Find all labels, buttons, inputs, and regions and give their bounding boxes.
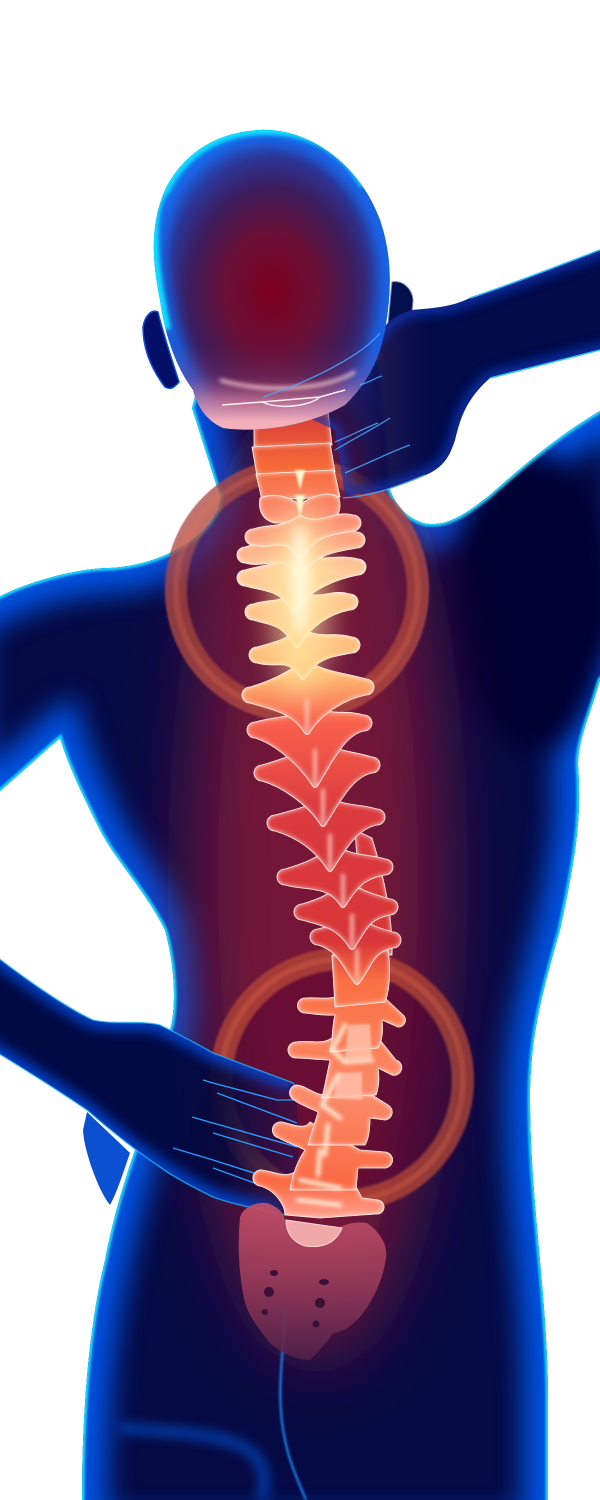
- torso silhouette: [0, 340, 600, 1500]
- icon: right ear: [388, 282, 413, 325]
- torso blue rim glow: [0, 360, 600, 1500]
- rib side strip: [355, 830, 392, 955]
- sacral holes: [262, 1270, 329, 1328]
- skull base bright ridge: [220, 372, 355, 388]
- skull base tint: [173, 352, 379, 430]
- head: [150, 130, 400, 435]
- lumbar vertebrae: [253, 950, 405, 1218]
- spine highlights: [270, 470, 372, 1205]
- right arm blue rim glow: [312, 250, 600, 495]
- thoracic white core: [292, 525, 308, 635]
- buttock crease glow: [120, 1428, 264, 1500]
- icon: left ear: [143, 311, 179, 388]
- head cyan rim on upper left: [154, 130, 365, 330]
- right hand and arm on neck: [312, 249, 600, 495]
- left hand rim line: [0, 925, 297, 1215]
- left hand on lower back: [0, 958, 300, 1216]
- finger gap lines: [173, 1080, 297, 1185]
- thoracic vertebrae: [237, 514, 401, 984]
- torso cyan rim line: [0, 360, 600, 1500]
- right arm rim lines: [470, 250, 600, 378]
- gluteal cleft line: [280, 1310, 306, 1500]
- sacrum pale central plate: [286, 1220, 342, 1247]
- lumbar bright details: [298, 1025, 372, 1205]
- cervical vertebrae: [252, 411, 340, 523]
- upper pain ring: [176, 469, 418, 711]
- icon: hip fold behind hand: [83, 1112, 130, 1205]
- lower pain ring: [210, 948, 474, 1212]
- left hand blue rim glow: [0, 960, 294, 1213]
- torso central red glow: [193, 400, 443, 1360]
- fingers on neck: [263, 333, 425, 498]
- cervical bright points: [295, 470, 305, 518]
- skull base ridge detail: [222, 390, 345, 406]
- sacrum: [239, 1203, 386, 1360]
- spinous ridge highlights: [307, 700, 357, 980]
- head blue rim glow: [154, 130, 390, 430]
- upper pain ring disc: [165, 458, 429, 722]
- lumbar pale block faces: [334, 1024, 372, 1100]
- spine: [237, 411, 405, 1218]
- thoracic warm glow: [270, 505, 330, 695]
- torso dark shoulder shading: [450, 450, 600, 750]
